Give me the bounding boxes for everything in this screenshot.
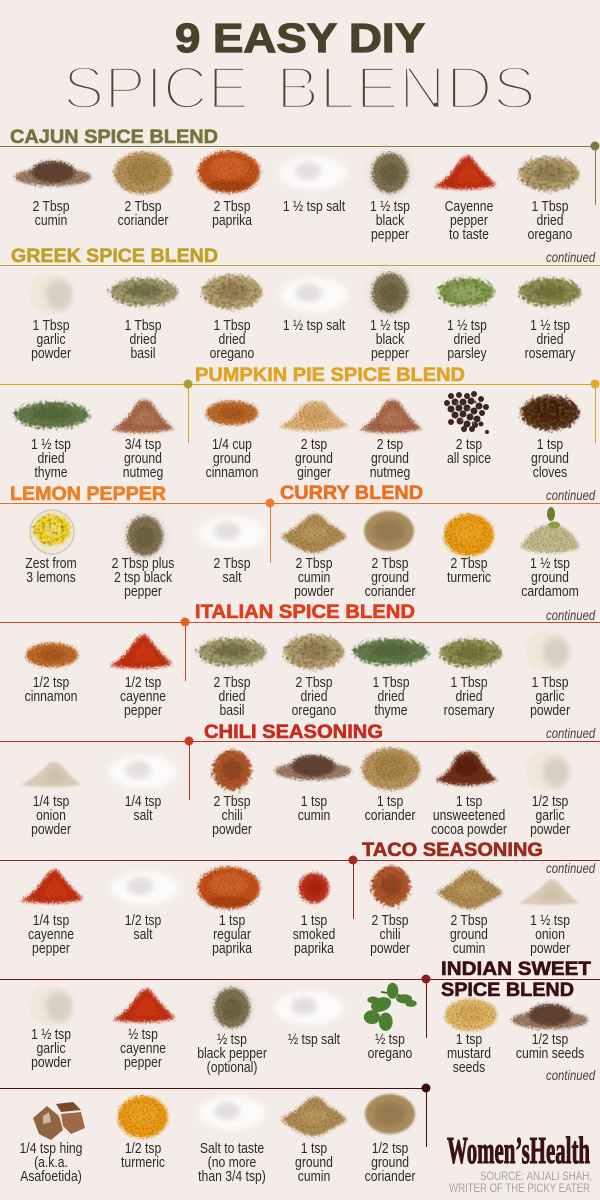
- spice: oregano leaf: ½ tsp: [375, 1031, 405, 1047]
- spice: salt: Salt to taste: [200, 1140, 264, 1156]
- divider line: [0, 741, 600, 800]
- spice: cayenne pepper: pepper: [32, 940, 70, 956]
- spice: dried parsley: [438, 278, 494, 361]
- spice: chili powder: [370, 866, 410, 956]
- spice: smoked paprika: paprika: [294, 940, 334, 956]
- spice: ground cumin: cumin: [453, 940, 485, 956]
- spice: dried basil: dried: [218, 688, 246, 704]
- connector dot: [422, 974, 430, 984]
- spice: garlic powder: garlic: [536, 688, 565, 704]
- spice: oregano leaf: oregano: [368, 1045, 412, 1061]
- connector dot: [422, 1084, 430, 1092]
- source credit: [449, 1169, 592, 1195]
- spice: garlic powder: [526, 751, 570, 837]
- spice: dried rosemary: dried: [536, 331, 564, 347]
- spice: dried thyme: [15, 402, 89, 480]
- spice: dried basil: 2 Tbsp: [214, 674, 250, 690]
- spice: ground cardamom: 1 ½ tsp: [530, 555, 570, 571]
- spice: dried rosemary: 1 ½ tsp: [530, 317, 570, 333]
- connector line: [270, 503, 272, 563]
- spice: cumin powder: cumin: [298, 569, 330, 585]
- spice: cumin: [15, 161, 91, 228]
- spice: ground nutmeg: ground: [371, 450, 409, 466]
- spice: black pepper: 1 ½ tsp: [370, 198, 410, 214]
- section: Taco seasoning: [0, 839, 600, 956]
- divider line: [0, 502, 600, 504]
- spice: ground nutmeg: ground: [124, 450, 162, 466]
- spice: onion powder: [21, 762, 81, 837]
- spice: salt: salt: [223, 569, 242, 585]
- spice: ground coriander: [365, 1094, 416, 1184]
- spice: dried parsley: dried: [453, 331, 481, 347]
- section: Chili seasoning: [0, 721, 600, 837]
- spice: dried thyme: thyme: [34, 464, 68, 480]
- spice: lemon zest: [25, 510, 77, 585]
- spice: salt: than 3/4 tsp): [198, 1168, 266, 1184]
- spice: cumin: cumin: [35, 212, 67, 228]
- spice: cayenne: [434, 156, 496, 242]
- spice: salt: [111, 871, 179, 942]
- connector dot: [180, 618, 190, 626]
- spice: cayenne pepper: [110, 635, 172, 718]
- spice: ground cumin: [437, 870, 503, 956]
- spice: cumin: cumin: [298, 807, 330, 823]
- section: Indian sweet spice blend: [0, 958, 600, 1083]
- spice: ground cinnamon: ground: [213, 450, 251, 466]
- spice: ground cardamom: cardamom: [521, 583, 579, 599]
- spice: ground cumin: 2 Tbsp: [451, 912, 487, 928]
- spice: black pepper: 2 Tbsp plus: [112, 555, 174, 571]
- spice: ground coriander: ground: [371, 569, 409, 585]
- spice: cayenne pepper: [113, 989, 175, 1070]
- section: Lemon pepper: [0, 483, 600, 599]
- spice: black pepper: black: [376, 331, 404, 347]
- spice: garlic powder: powder: [530, 821, 570, 837]
- spice: dried oregano: 1 Tbsp: [214, 317, 250, 333]
- spice: dried thyme: [354, 639, 428, 718]
- spice: unsweetened cocoa powder: unsweetened: [433, 807, 505, 823]
- spice: ground nutmeg: 3/4 tsp: [125, 436, 161, 452]
- spice: smoked paprika: 1 tsp: [301, 912, 327, 928]
- heading: Cajun: CAJUN SPICE BLEND: [10, 126, 218, 148]
- spice: dried basil: [110, 278, 178, 361]
- spice: ground coriander: 2 Tbsp: [372, 555, 409, 571]
- spice: chili powder: chili: [380, 926, 401, 942]
- spice: ground cardamom: ground: [531, 569, 569, 585]
- spice: dried thyme: dried: [37, 450, 65, 466]
- divider line: [0, 979, 600, 1038]
- spice: salt: [198, 516, 266, 585]
- spice: onion powder: onion: [36, 807, 66, 823]
- connector dot: [590, 142, 600, 150]
- spice: ground cumin: 1 tsp: [301, 1140, 327, 1156]
- connector dot left: [184, 380, 192, 388]
- spice: cayenne: to taste: [449, 226, 489, 242]
- spice: mustard seeds: 1 tsp: [456, 1031, 482, 1047]
- title line: Spice Blends: SPICE: [63, 54, 249, 122]
- spice: dried thyme: dried: [377, 688, 405, 704]
- spice: cayenne pepper: cayenne: [120, 1040, 166, 1056]
- spice: black pepper: ½ tsp: [217, 1031, 247, 1047]
- heading: Indian line 2: SPICE BLEND: [441, 979, 574, 1001]
- spice: ground ginger: 2 tsp: [301, 436, 327, 452]
- title line: Spice Blends: [63, 54, 536, 122]
- spice: turmeric: [118, 1096, 168, 1170]
- spice: ground coriander: 1/2 tsp: [372, 1140, 408, 1156]
- spice: garlic powder: 1 Tbsp: [532, 674, 569, 690]
- spice: ground coriander: coriander: [365, 583, 416, 599]
- continued note: continued: [546, 1068, 596, 1083]
- heading: Curry: CURRY BLEND: [280, 482, 423, 504]
- spice: salt: 1/4 tsp: [125, 793, 161, 809]
- spice: all spice: 2 tsp: [456, 436, 482, 452]
- spice: hing: [20, 1102, 85, 1184]
- spice: ground coriander: ground: [371, 1154, 409, 1170]
- section: Pumpkin pie spice blend: [0, 364, 600, 480]
- spice: cayenne pepper: cayenne: [120, 688, 166, 704]
- spice: garlic powder: [29, 986, 73, 1070]
- spice: garlic powder: 1 ½ tsp: [31, 1026, 71, 1042]
- spice: regular paprika: 1 tsp: [219, 912, 245, 928]
- spice: oregano leaf: [364, 983, 417, 1061]
- spice: ground cumin: ground: [450, 926, 488, 942]
- spice: onion powder: onion: [535, 926, 565, 942]
- spice: cayenne pepper: pepper: [124, 1054, 162, 1070]
- spice: salt: salt: [134, 926, 153, 942]
- spice: lemon zest: Zest from: [25, 555, 77, 571]
- spice: salt: [198, 1096, 266, 1184]
- heading: Greek: GREEK SPICE BLEND: [11, 245, 218, 267]
- spice: coriander: coriander: [365, 807, 416, 823]
- spice: all spice: [444, 391, 491, 466]
- continued note: continued: [546, 861, 596, 876]
- spice: cinnamon: cinnamon: [25, 688, 77, 704]
- spice: oregano: oregano: [528, 226, 572, 242]
- spice: smoked paprika: [293, 873, 335, 956]
- spice: garlic powder: powder: [31, 1054, 71, 1070]
- title line: 9 Easy DIY: 9 EASY DIY: [175, 15, 425, 61]
- spice: dried oregano: [284, 635, 344, 718]
- spice: dried oregano: 2 Tbsp: [296, 674, 332, 690]
- spice: ground cumin: [281, 1097, 347, 1184]
- spice: dried thyme: 1 ½ tsp: [31, 436, 71, 452]
- heading: Indian line 1: INDIAN SWEET: [441, 958, 591, 980]
- spice: regular paprika: regular: [213, 926, 251, 942]
- spice: coriander: 1 tsp: [377, 793, 403, 809]
- spice: garlic powder: [526, 631, 570, 718]
- section: Curry blend: [266, 482, 596, 599]
- divider line: [0, 622, 600, 681]
- spice: paprika: [198, 151, 260, 228]
- spice: cayenne: Cayenne: [445, 198, 493, 214]
- spice: ground coriander: coriander: [365, 1168, 416, 1184]
- spice: dried basil: 1 Tbsp: [125, 317, 161, 333]
- spice: ground ginger: ground: [295, 450, 333, 466]
- spice: ground cinnamon: 1/4 cup: [212, 436, 252, 452]
- spice: ground cloves: cloves: [533, 464, 568, 480]
- spice: cinnamon: 1/2 tsp: [33, 674, 69, 690]
- spice: cayenne pepper: 1/4 tsp: [33, 912, 69, 928]
- spice: dried rosemary: rosemary: [525, 345, 576, 361]
- spice: black pepper: pepper: [371, 345, 409, 361]
- spice: ground nutmeg: nutmeg: [370, 464, 410, 480]
- divider line: [0, 1088, 426, 1147]
- spice: oregano: [519, 157, 579, 242]
- spice: turmeric: 1/2 tsp: [125, 1140, 161, 1156]
- spice: garlic powder: garlic: [536, 807, 565, 823]
- spice: cumin seeds: [512, 1004, 588, 1061]
- heading: Italian: ITALIAN SPICE BLEND: [195, 601, 415, 623]
- spice: dried oregano: oregano: [292, 702, 336, 718]
- spice: mustard seeds: mustard: [447, 1045, 491, 1061]
- spice: garlic powder: powder: [31, 345, 71, 361]
- spice: black pepper: pepper: [371, 226, 409, 242]
- spice: ground cinnamon: cinnamon: [206, 464, 258, 480]
- spice: cumin seeds: 1/2 tsp: [532, 1031, 568, 1047]
- spice: hing: (a.k.a.: [34, 1154, 68, 1170]
- spice: black pepper: [112, 513, 175, 599]
- connector line: [0, 146, 596, 205]
- spice: dried basil: [198, 638, 266, 718]
- spice: unsweetened cocoa powder: cocoa powder: [431, 821, 507, 837]
- spice: dried oregano: oregano: [210, 345, 254, 361]
- spice: ground cumin: ground: [295, 1154, 333, 1170]
- spice: chili powder: powder: [212, 821, 252, 837]
- spice: onion powder: [519, 880, 579, 956]
- spice: ground coriander: [364, 511, 416, 599]
- spice: onion powder: powder: [31, 821, 71, 837]
- spice: coriander: [114, 152, 172, 228]
- spice: cumin: 2 Tbsp: [33, 198, 69, 214]
- spice: cumin: 1 tsp: [301, 793, 327, 809]
- spice: cumin seeds: cumin seeds: [516, 1045, 584, 1061]
- spice: dried oregano: dried: [218, 331, 246, 347]
- spice: dried oregano: dried: [300, 688, 328, 704]
- spice: garlic powder: [29, 274, 73, 361]
- spice: ground ginger: [279, 401, 349, 480]
- spice: cumin powder: 2 Tbsp: [296, 555, 333, 571]
- spice: paprika: paprika: [212, 212, 253, 228]
- section: Greek spice blend: [0, 245, 600, 361]
- heading: Taco: TACO SEASONING: [362, 839, 543, 861]
- spice: coriander: [362, 748, 420, 823]
- spice: coriander: 2 Tbsp: [125, 198, 162, 214]
- spice: ground cloves: ground: [531, 450, 569, 466]
- spice: chili powder: chili: [222, 807, 243, 823]
- section: Italian spice blend: [0, 601, 600, 718]
- spice: salt: 1 ½ tsp salt: [283, 198, 345, 214]
- spice: mustard seeds: seeds: [453, 1059, 486, 1075]
- heading: Pumpkin pie: PUMPKIN PIE SPICE BLEND: [195, 364, 465, 386]
- spice: ground ginger: ginger: [297, 464, 331, 480]
- spice: turmeric: [444, 514, 494, 585]
- continued note: continued: [546, 250, 596, 265]
- spice: cayenne pepper: 1/2 tsp: [125, 674, 161, 690]
- spice: black pepper: pepper: [124, 583, 162, 599]
- spice: cayenne pepper: ½ tsp: [128, 1026, 158, 1042]
- spice: black pepper: 2 tsp black: [114, 569, 172, 585]
- spice: cayenne pepper: pepper: [124, 702, 162, 718]
- spice: ground cloves: [521, 396, 579, 480]
- spice: paprika: 2 Tbsp: [214, 198, 251, 214]
- spice: turmeric: turmeric: [121, 1154, 165, 1170]
- spice: ground cloves: 1 tsp: [537, 436, 563, 452]
- spice: oregano: 1 Tbsp: [532, 198, 568, 214]
- spice: ground nutmeg: [112, 400, 174, 480]
- spice: cayenne: pepper: [450, 212, 488, 228]
- spice: chili powder: 2 Tbsp: [214, 793, 251, 809]
- spice: unsweetened cocoa powder: [431, 751, 507, 837]
- spice: dried rosemary: rosemary: [444, 702, 495, 718]
- spice: cinnamon: [25, 643, 78, 704]
- spice: turmeric: 2 Tbsp: [451, 555, 488, 571]
- heading: Chili: CHILI SEASONING: [204, 721, 383, 743]
- spice: garlic powder: powder: [530, 702, 570, 718]
- spice: hing: Asafoetida): [20, 1168, 82, 1184]
- connector dot: [266, 498, 274, 508]
- spice: black pepper: (optional): [207, 1059, 257, 1075]
- spice: dried basil: dried: [129, 331, 157, 347]
- spice: hing: 1/4 tsp hing: [20, 1140, 82, 1156]
- spice: dried rosemary: [519, 278, 581, 361]
- spice: black pepper: 1 ½ tsp: [370, 317, 410, 333]
- spice: cayenne pepper: cayenne: [28, 926, 74, 942]
- spice: turmeric: turmeric: [447, 569, 491, 585]
- spice: onion powder: 1 ½ tsp: [530, 912, 570, 928]
- spice: salt: ½ tsp salt: [288, 1031, 340, 1047]
- spice: ground nutmeg: [360, 400, 422, 480]
- spice: cumin powder: powder: [294, 583, 334, 599]
- spice: ground cinnamon: [206, 401, 258, 480]
- connector dot: [184, 736, 194, 746]
- spice: dried parsley: parsley: [447, 345, 487, 361]
- spice: dried thyme: 1 Tbsp: [373, 674, 409, 690]
- connector dot right: [590, 380, 600, 388]
- divider line: [0, 264, 600, 266]
- spice: onion powder: 1/4 tsp: [33, 793, 69, 809]
- spice: salt: [280, 278, 348, 333]
- spice: black pepper: [197, 985, 267, 1075]
- divider line: [0, 860, 600, 919]
- spice: black pepper: [367, 270, 413, 361]
- heading: Lemon pepper: LEMON PEPPER: [10, 483, 166, 505]
- divider line: [0, 384, 596, 443]
- spice: salt: salt: [134, 807, 153, 823]
- spice: salt: (no more: [208, 1154, 256, 1170]
- spice: dried parsley: 1 ½ tsp: [447, 317, 487, 333]
- continued note: continued: [546, 608, 596, 623]
- spice: oregano: dried: [536, 212, 564, 228]
- spice: regular paprika: [198, 867, 260, 956]
- spice: salt: 1 ½ tsp salt: [283, 317, 345, 333]
- spice: ground nutmeg: nutmeg: [123, 464, 163, 480]
- spice: cumin: [275, 755, 351, 823]
- spice: dried basil: basil: [219, 702, 245, 718]
- spice: black pepper: black pepper: [197, 1045, 267, 1061]
- spice: salt: [275, 991, 343, 1047]
- spice: mustard seeds: [445, 999, 497, 1075]
- spice: cayenne pepper: [21, 870, 83, 956]
- spice: black pepper: [367, 150, 413, 242]
- spice: garlic powder: 1/2 tsp: [532, 793, 568, 809]
- spice: chili powder: [212, 750, 252, 837]
- section: Cajun spice blend: [0, 126, 600, 242]
- connector dot: [348, 856, 358, 864]
- spice: all spice: all spice: [447, 450, 491, 466]
- continued note: continued: [546, 726, 596, 741]
- spice: chili powder: powder: [370, 940, 410, 956]
- spice: garlic powder: garlic: [37, 331, 66, 347]
- spice: garlic powder: garlic: [37, 1040, 66, 1056]
- spice: dried rosemary: [440, 639, 502, 718]
- continued note: continued: [546, 488, 596, 503]
- title line: Spice Blends: BLENDS: [276, 54, 536, 122]
- spice: smoked paprika: smoked: [293, 926, 335, 942]
- section: Final blend: [0, 1084, 430, 1184]
- spice: regular paprika: paprika: [212, 940, 253, 956]
- spice: ground cardamom: [521, 507, 579, 599]
- spice: lemon zest: 3 lemons: [26, 569, 76, 585]
- spice: dried rosemary: dried: [455, 688, 483, 704]
- spice: dried oregano: [202, 275, 262, 361]
- spice: salt: 2 Tbsp: [214, 555, 250, 571]
- spice: dried rosemary: 1 Tbsp: [451, 674, 488, 690]
- spice: chili powder: 2 Tbsp: [372, 912, 409, 928]
- spice: dried thyme: thyme: [374, 702, 408, 718]
- spice: onion powder: powder: [530, 940, 570, 956]
- spice: salt: [109, 755, 177, 823]
- spice: salt: [279, 156, 347, 214]
- spice: garlic powder: 1 Tbsp: [33, 317, 70, 333]
- spice: coriander: coriander: [118, 212, 169, 228]
- spice: black pepper: black: [376, 212, 404, 228]
- spice: unsweetened cocoa powder: 1 tsp: [456, 793, 482, 809]
- spice: cumin powder: [281, 514, 347, 599]
- spice: ground nutmeg: 2 tsp: [377, 436, 403, 452]
- spice: dried basil: basil: [130, 345, 156, 361]
- spice: ground cumin: cumin: [298, 1168, 330, 1184]
- spice: salt: 1/2 tsp: [125, 912, 161, 928]
